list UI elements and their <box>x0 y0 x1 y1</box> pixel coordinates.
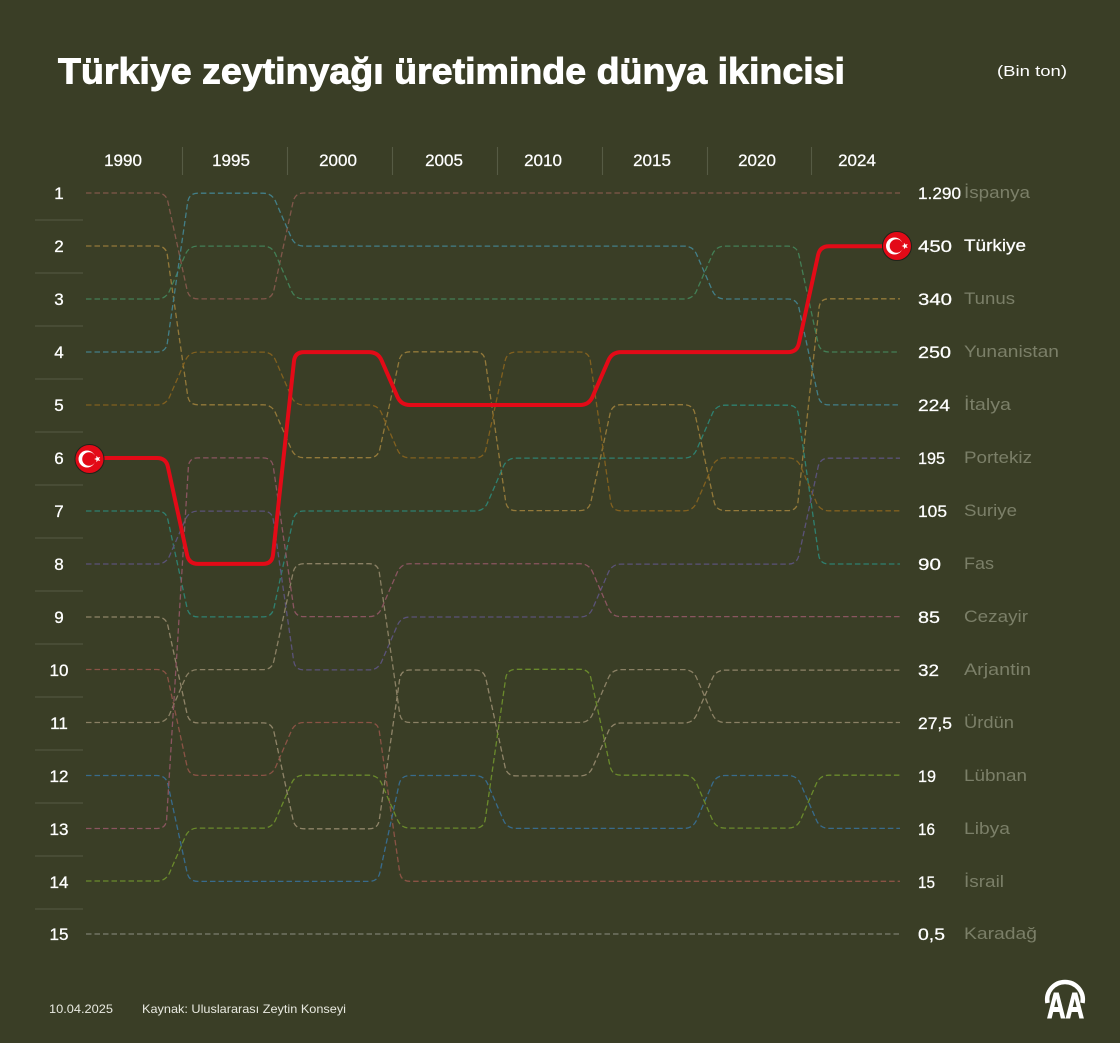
production values: 27,5 <box>918 714 952 733</box>
bump chart lines <box>86 193 900 934</box>
line: Ürdün <box>86 564 900 723</box>
line: Lübnan <box>86 669 900 881</box>
country names: Suriye <box>964 501 1017 520</box>
line: İspanya <box>86 193 900 299</box>
production values: 340 <box>918 290 952 309</box>
title: Türkiye zeytinyağı üretiminde dünya ikincisi <box>58 50 845 92</box>
production values <box>918 184 961 944</box>
country names: Arjantin <box>964 660 1031 679</box>
year header: 1995 <box>212 151 250 170</box>
rank axis: 6 <box>54 449 64 468</box>
country names: Fas <box>964 554 994 573</box>
rank axis: 5 <box>54 396 64 415</box>
line: Fas <box>86 405 900 617</box>
year header: 2020 <box>738 151 776 170</box>
year header: 2024 <box>838 151 876 170</box>
year header: 2005 <box>425 151 463 170</box>
rank axis: 9 <box>54 608 64 627</box>
country names: İspanya <box>964 183 1031 202</box>
rank axis: 2 <box>54 237 64 256</box>
country names: Tunus <box>964 289 1015 308</box>
rank axis: 7 <box>54 502 64 521</box>
line: Cezayir <box>86 458 900 828</box>
year header: 2010 <box>524 151 562 170</box>
country names: Karadağ <box>964 924 1037 943</box>
production values: 19 <box>918 767 936 786</box>
icon: Turkish flag end <box>882 232 912 260</box>
rank axis: 15 <box>50 925 68 944</box>
production values: 1.290 <box>918 184 961 203</box>
line: Karadağ <box>86 933 900 935</box>
line: İtalya <box>86 193 900 405</box>
production values: 105 <box>918 502 947 521</box>
year header: 1990 <box>104 151 142 170</box>
year header: 2000 <box>319 151 357 170</box>
unit note: (Bin ton) <box>997 63 1067 80</box>
country names: Türkiye <box>964 236 1026 255</box>
year header: 2015 <box>633 151 671 170</box>
country names: Yunanistan <box>964 342 1059 361</box>
line: Tunus <box>86 246 900 511</box>
rank axis: 11 <box>50 714 68 733</box>
line: Yunanistan <box>86 246 900 352</box>
line: Portekiz <box>86 458 900 670</box>
country names: Portekiz <box>964 448 1032 467</box>
rank axis: 8 <box>54 555 64 574</box>
year header <box>104 151 876 170</box>
logo: AA <box>1047 982 1084 1026</box>
line: Libya <box>86 776 900 881</box>
production values: 85 <box>918 608 940 627</box>
rank axis: 12 <box>50 767 68 786</box>
country names: Lübnan <box>964 766 1027 785</box>
line: Arjantin <box>86 617 900 829</box>
production values: 15 <box>918 873 935 892</box>
country names: İtalya <box>964 395 1012 414</box>
production values: 224 <box>918 396 950 415</box>
logo: AA: AA <box>1047 985 1084 1026</box>
production values: 16 <box>918 820 935 839</box>
country names: Cezayir <box>964 607 1028 626</box>
rank axis: 10 <box>50 661 68 680</box>
line: İsrail <box>86 670 900 881</box>
line: Türkiye highlight <box>90 246 897 564</box>
country names <box>964 183 1059 943</box>
rank axis: 14 <box>50 873 68 892</box>
rank axis: 3 <box>54 290 64 309</box>
footer source: Kaynak: Uluslararası Zeytin Konseyi <box>142 1002 346 1016</box>
footer date: 10.04.2025 <box>49 1002 113 1016</box>
rank axis <box>50 184 68 944</box>
production values: 0,5 <box>918 925 945 944</box>
production values: 250 <box>918 343 951 362</box>
production values: 90 <box>918 555 941 574</box>
rank axis: 4 <box>54 343 64 362</box>
production values: 32 <box>918 661 939 680</box>
rank axis: 1 <box>54 184 64 203</box>
rank axis: 13 <box>50 820 68 839</box>
country names: Libya <box>964 819 1011 838</box>
line: Suriye <box>86 352 900 511</box>
icon: Turkish flag start <box>75 444 104 474</box>
production values: 195 <box>918 449 945 468</box>
country names: Ürdün <box>964 713 1014 732</box>
production values: 450 <box>918 237 952 256</box>
country names: İsrail <box>964 872 1004 891</box>
